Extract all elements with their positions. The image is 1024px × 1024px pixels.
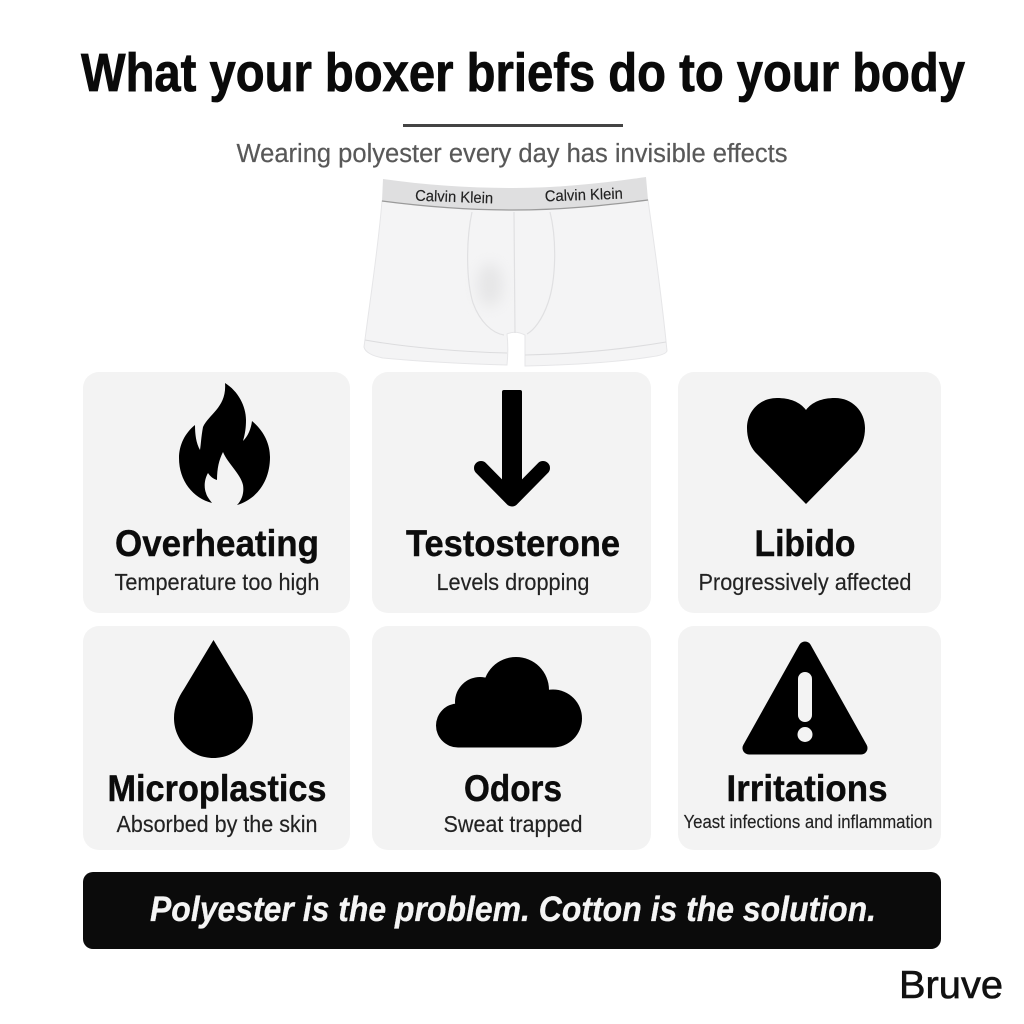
panel: microplastics (83, 626, 350, 850)
caption: overheating: Temperature too high (114, 569, 320, 595)
caption: microplastics: Absorbed by the skin (116, 811, 318, 837)
icon: water drop (174, 640, 253, 758)
heading: overheating: Overheating (115, 523, 319, 564)
illustration: white boxer briefs (364, 177, 667, 366)
brand logo: Bruve: Bruve (899, 964, 1003, 1007)
panel: testosterone (372, 372, 651, 613)
heading: libido: Libido (754, 523, 856, 564)
illustration: white boxer briefs: Calvin Klein (415, 188, 493, 207)
heading: microplastics: Microplastics (108, 768, 326, 809)
panel: odors (372, 626, 651, 850)
heading: irritations: Irritations (726, 768, 888, 809)
banner: conclusion: Polyester is the problem. Cotton is the solution. (150, 890, 876, 929)
heading: testosterone: Testosterone (406, 523, 620, 564)
panel: overheating (83, 372, 350, 613)
illustration: white boxer briefs: Calvin Klein (545, 186, 623, 205)
icon: flame (179, 383, 270, 505)
panel: libido (678, 372, 941, 613)
icon: cloud (436, 657, 582, 748)
icon: heart (747, 398, 865, 504)
caption: libido: Progressively affected (698, 569, 912, 595)
icon: warning triangle (749, 648, 861, 748)
banner: conclusion (83, 872, 941, 949)
caption: odors: Sweat trapped (444, 811, 582, 837)
caption: irritations: Yeast infections and inflammation (684, 811, 932, 832)
caption: testosterone: Levels dropping (436, 569, 590, 595)
subtitle: Wearing polyester every day has invisible effects (236, 140, 788, 168)
panel: irritations (678, 626, 941, 850)
icon: down arrow (481, 390, 543, 500)
heading: odors: Odors (464, 768, 562, 809)
